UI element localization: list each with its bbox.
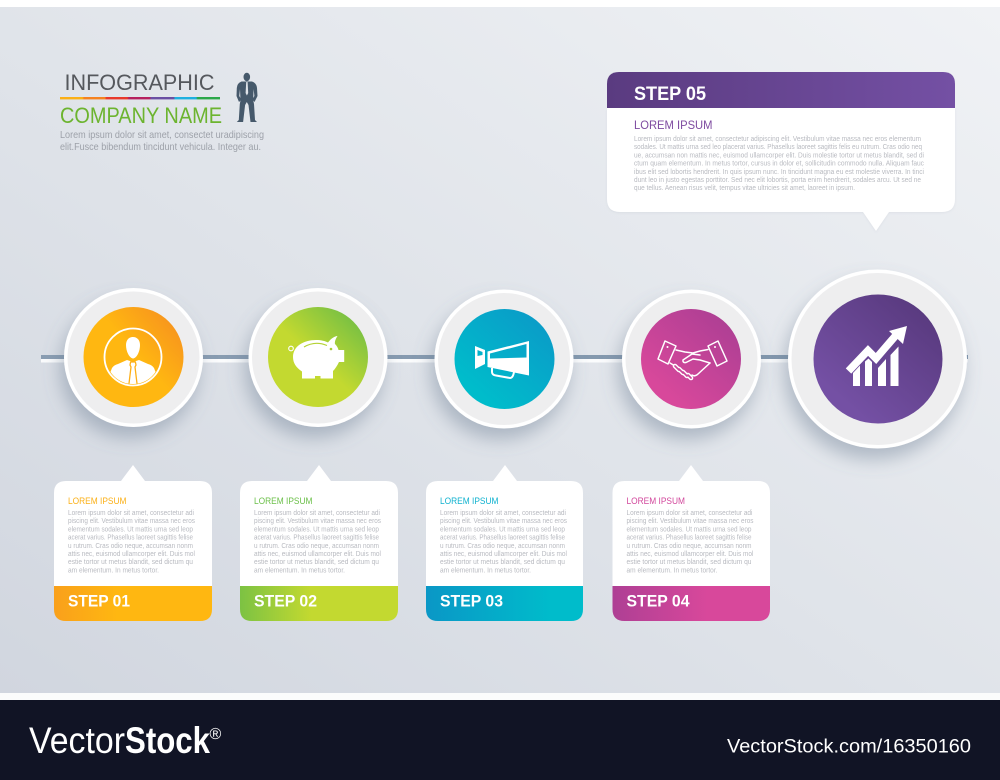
step 02 text: u rutrum. Cras odio neque, accumsan nonm: [254, 543, 379, 550]
step 01 circle: [64, 288, 203, 427]
step 01 text: acerat varius. Phasellus laoreet sagittis felise: [68, 535, 193, 542]
footer bar: [0, 693, 1000, 780]
panel: step 03 card: [426, 465, 583, 621]
step 03 text: acerat varius. Phasellus laoreet sagittis felise: [440, 535, 565, 542]
step 05 heading: LOREM IPSUM: [634, 118, 712, 132]
step 03 footer: [426, 586, 583, 621]
step 04 heading: LOREM IPSUM: [626, 496, 685, 506]
step 05 body text: ue, accumsan non mattis nec, euismod ullamcorper elit. Duis molestie tortor ut metus blandit, sed di: [634, 152, 924, 159]
step 02 text: piscing elit. Vestibulum vitae massa nec eros: [254, 518, 381, 525]
step 04 text: elementum sodales. Ut mattis urna sed leop: [626, 526, 752, 533]
step 02 text: estie tortor ut metus blandit, sed dictum qu: [254, 559, 379, 566]
timeline connector: [41, 355, 968, 362]
step 04 text: Lorem ipsum dolor sit amet, consectetur adi: [626, 510, 753, 517]
step 03 label: STEP 03: [440, 592, 503, 610]
callout body: [607, 108, 955, 231]
step 04 text: am elementum. In metus tortor.: [626, 567, 718, 574]
step 01 text: Lorem ipsum dolor sit amet, consectetur adi: [68, 510, 194, 517]
step 02 heading: LOREM IPSUM: [254, 496, 312, 506]
panel: step 01 card: [54, 465, 212, 621]
panel: step 04 card: [612, 465, 770, 621]
step 04 text: piscing elit. Vestibulum vitae massa nec eros: [626, 518, 754, 525]
panel: step 02 card: [240, 465, 398, 621]
icon: person in ring: [104, 328, 162, 386]
step 04 circle: [622, 290, 761, 428]
step 01 text: attis nec, euismod ullamcorper elit. Duis mol: [68, 551, 195, 558]
step 01 label: STEP 01: [68, 592, 130, 610]
step 03 text: elementum sodales. Ut mattis urna sed leop: [440, 526, 565, 533]
company name: COMPANY NAME: [60, 103, 222, 128]
step 04 text: attis nec, euismod ullamcorper elit. Duis mol: [626, 551, 754, 558]
step 03 circle: [434, 290, 574, 428]
step 04 text: [626, 510, 754, 574]
footer logo: VectorStock: [29, 720, 210, 761]
icon: growth chart: [848, 326, 907, 386]
step 02 text: am elementum. In metus tortor.: [254, 567, 345, 574]
step 03 text: estie tortor ut metus blandit, sed dictum qu: [440, 559, 565, 566]
step 03 text: [440, 510, 567, 574]
step 05 body text: dunt leo in justo egestas porttitor. Sed nec elit lobortis, porta enim hendrerit, sodales arcu. Ut sed ne: [634, 177, 921, 184]
step 03 heading: LOREM IPSUM: [440, 496, 498, 506]
step 05 body text: ctum quam elementum. In metus tortor, cursus in dolor et, sollicitudin commodo nulla. Aliquam fauc: [634, 161, 924, 168]
registered mark: ®: [210, 726, 222, 743]
intro text: [60, 130, 264, 153]
step 05 header bar: [607, 72, 955, 108]
step 01 text: piscing elit. Vestibulum vitae massa nec eros: [68, 518, 195, 525]
step 02 text: acerat varius. Phasellus laoreet sagittis felise: [254, 535, 379, 542]
step 05 body text: sodales. Ut mattis urna sed leo placerat varius. Phasellus laoreet sagittis felis eu rutrum. Cras odio neq: [634, 144, 922, 151]
step 02 text: attis nec, euismod ullamcorper elit. Duis mol: [254, 551, 381, 558]
icon: businessman: [236, 73, 258, 122]
rainbow rule: [60, 97, 220, 99]
step 01 text: u rutrum. Cras odio neque, accumsan nonm: [68, 543, 193, 550]
step 01 text: am elementum. In metus tortor.: [68, 567, 159, 574]
title block: [60, 70, 264, 153]
step 02 text: [254, 510, 381, 574]
step 02 circle: [248, 288, 388, 427]
footer url: VectorStock.com/16350160: [727, 736, 971, 758]
step 04 label: STEP 04: [626, 592, 690, 610]
intro text: elit.Fusce bibendum tincidunt vehicula. Integer au.: [60, 142, 261, 153]
step 04 footer: [612, 586, 770, 621]
step 01 text: elementum sodales. Ut mattis urna sed leop: [68, 526, 193, 533]
step 04 text: estie tortor ut metus blandit, sed dictum qu: [626, 559, 752, 566]
step 02 label: STEP 02: [254, 592, 317, 610]
step 04 text: u rutrum. Cras odio neque, accumsan nonm: [626, 543, 752, 550]
step 03 text: am elementum. In metus tortor.: [440, 567, 531, 574]
panel: step 05 callout: [607, 72, 955, 231]
step 02 text: elementum sodales. Ut mattis urna sed leop: [254, 526, 379, 533]
step 01 heading: LOREM IPSUM: [68, 496, 126, 506]
icon: piggy bank: [289, 336, 344, 378]
intro text: Lorem ipsum dolor sit amet, consectet uradipiscing: [60, 130, 264, 141]
icon: handshake: [658, 341, 727, 378]
step 02 text: Lorem ipsum dolor sit amet, consectetur adi: [254, 510, 380, 517]
step 03 text: attis nec, euismod ullamcorper elit. Duis mol: [440, 551, 567, 558]
step 03 text: u rutrum. Cras odio neque, accumsan nonm: [440, 543, 565, 550]
step 04 text: acerat varius. Phasellus laoreet sagittis felise: [626, 535, 752, 542]
step 05 body text: Lorem ipsum dolor sit amet, consectetur adipiscing elit. Vestibulum vitae massa nec eros elementum: [634, 136, 921, 143]
step 05 body text: [634, 136, 924, 192]
step 05 body text: ibus elit sed lobortis hendrerit. In quis ipsum nunc. In tincidunt magna eu est molestie viverra. In tinci: [634, 169, 924, 176]
step 05 body text: que tellus. Aenean risus velit, tempus vitae ultricies sit amet, laoreet in ipsum.: [634, 185, 855, 192]
step 01 text: [68, 510, 195, 574]
step 01 text: estie tortor ut metus blandit, sed dictum qu: [68, 559, 193, 566]
title: infographic: INFOGRAPHIC: [64, 70, 214, 95]
icon: megaphone: [475, 341, 529, 378]
step 01 footer: [54, 586, 212, 621]
step 03 text: piscing elit. Vestibulum vitae massa nec eros: [440, 518, 567, 525]
step 05 label: STEP 05: [634, 83, 706, 105]
step 02 footer: [240, 586, 398, 621]
step 05 circle: [788, 270, 967, 448]
step 03 text: Lorem ipsum dolor sit amet, consectetur adi: [440, 510, 566, 517]
